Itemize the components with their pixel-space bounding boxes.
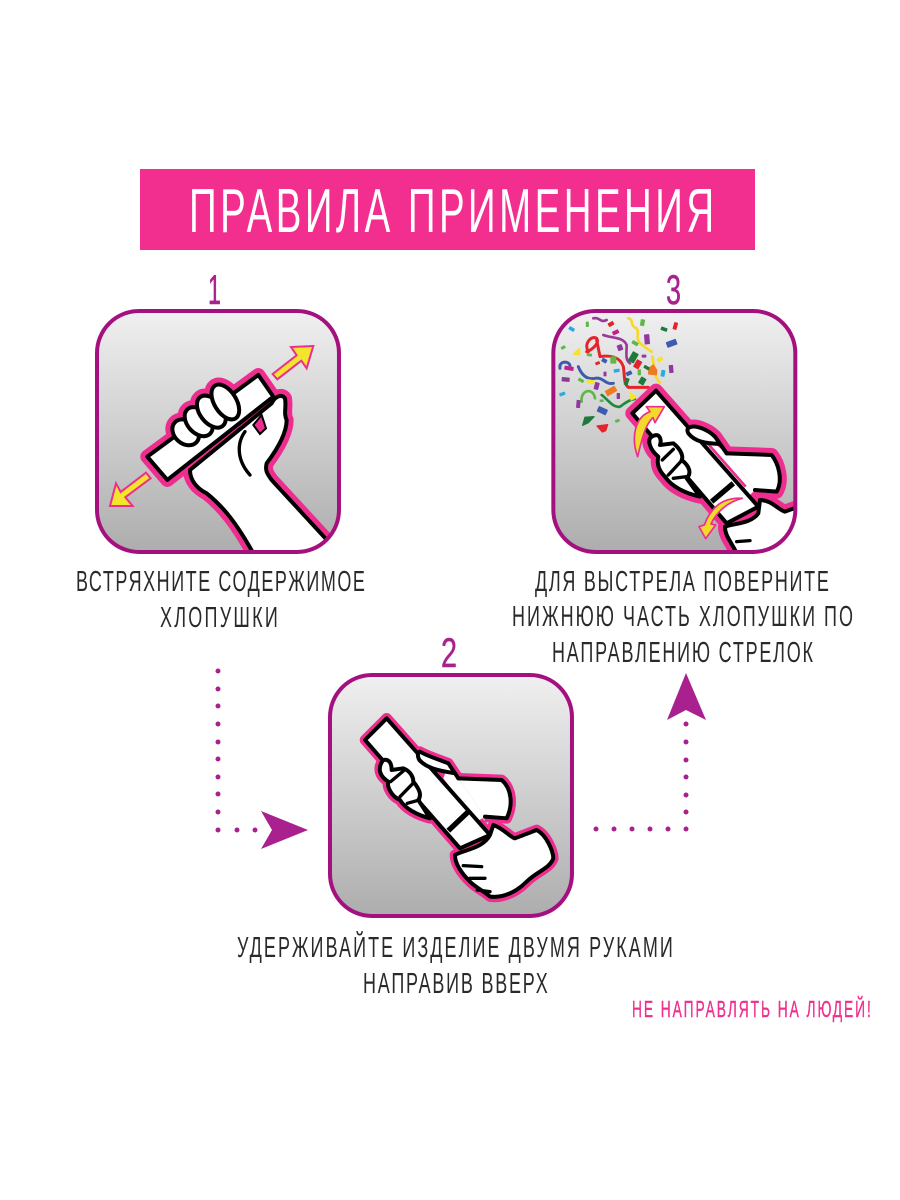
arrow: lower twist <box>699 498 742 539</box>
arrow: dotted step 1 to step 2 <box>216 668 308 849</box>
caption: step 3: ДЛЯ ВЫСТРЕЛА ПОВЕРНИТЕ <box>535 566 829 598</box>
arrow: down left <box>110 473 151 506</box>
panel: step 2 hold <box>330 675 572 916</box>
panel: step 1 shake <box>97 311 339 553</box>
confetti burst <box>560 318 677 432</box>
icon: two hands holding popper <box>365 718 553 897</box>
caption: step 3: НАПРАВЛЕНИЮ СТРЕЛОК <box>552 637 813 669</box>
caption: step 1: ВСТРЯХНИТЕ СОДЕРЖИМОЕ <box>76 566 365 598</box>
caption: step 2: УДЕРЖИВАЙТЕ ИЗДЕЛИЕ ДВУМЯ РУКАМИ <box>237 931 673 964</box>
panel: step 3 fire <box>553 311 798 557</box>
infographic canvas <box>77 169 870 1022</box>
caption: step 2: НАПРАВИВ ВВЕРХ <box>363 968 548 1000</box>
caption: step 3 <box>512 566 853 669</box>
warning note: НЕ НАПРАВЛЯТЬ НА ЛЮДЕЙ! <box>632 996 871 1023</box>
step number 3: 3 <box>666 266 681 313</box>
caption: step 3: НИЖНЮЮ ЧАСТЬ ХЛОПУШКИ ПО <box>512 601 853 633</box>
title banner: ПРАВИЛА ПРИМЕНЕНИЯ <box>189 176 714 245</box>
arrow: up right <box>273 346 313 379</box>
step number 2: 2 <box>441 629 457 676</box>
caption: step 2 <box>237 931 673 1000</box>
arrow: upper twist <box>634 407 664 457</box>
icon: two hands twisting popper <box>632 391 798 557</box>
arrow: dotted step 2 to step 3 <box>594 673 706 832</box>
step number 1: 1 <box>208 266 221 313</box>
caption: step 1 <box>76 566 365 634</box>
icon: hand gripping popper <box>147 375 330 553</box>
caption: step 1: ХЛОПУШКИ <box>160 602 278 634</box>
